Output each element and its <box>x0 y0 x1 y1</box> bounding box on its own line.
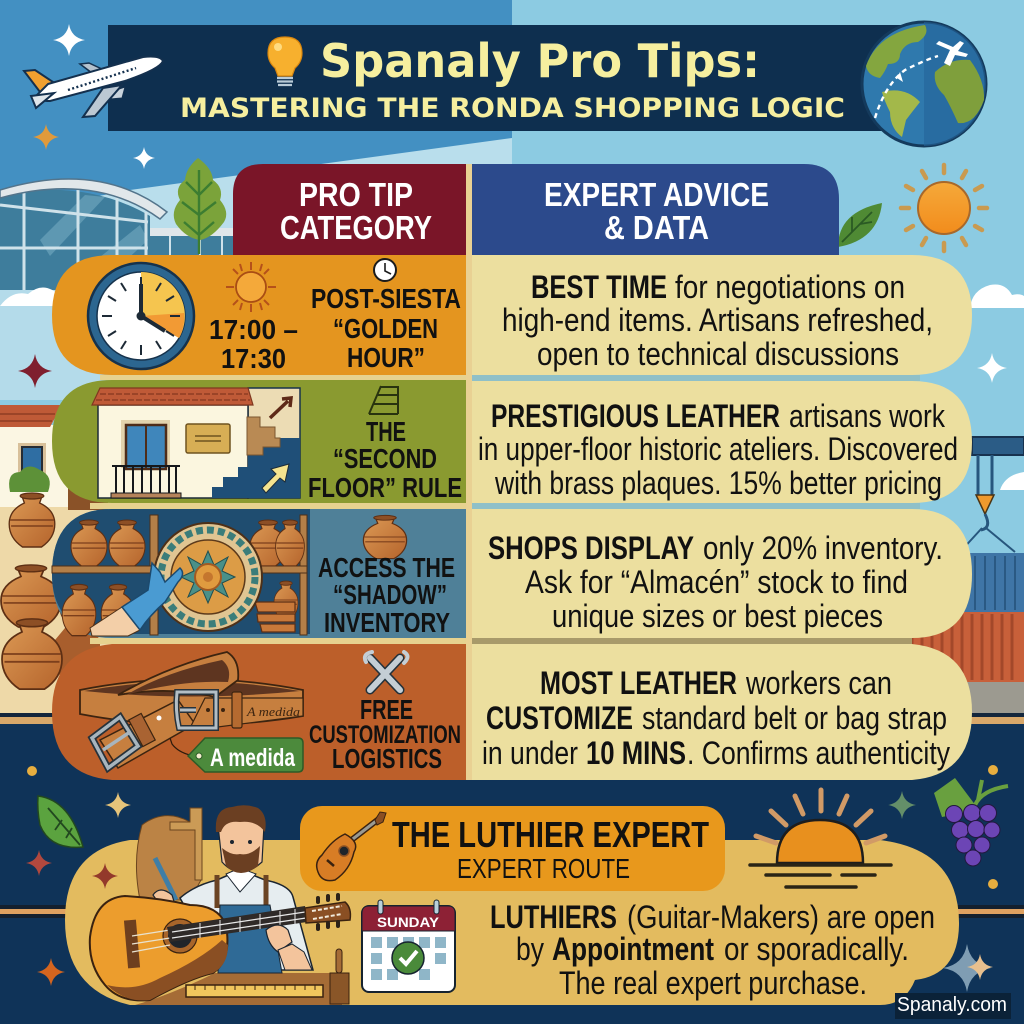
icon: star white right <box>977 353 1007 383</box>
scene: crane and containers <box>900 437 1024 682</box>
panel: header pro tip category: CATEGORY <box>280 209 432 246</box>
icon: hand with blue glove <box>90 563 183 636</box>
banner: luthier expert: THE LUTHIER EXPERT <box>392 814 709 855</box>
title text: Spanaly Pro Tips: <box>320 34 760 88</box>
icon: ladder <box>369 386 398 414</box>
icon: leaf tree <box>174 158 226 254</box>
shadow inventory label <box>318 552 455 638</box>
icon: setting sun <box>750 790 891 887</box>
luthier advice text: by <box>516 931 544 967</box>
luthier figure <box>153 805 313 973</box>
icon: globe <box>862 22 986 146</box>
second floor label: THE <box>366 416 406 447</box>
panel: row 3 advice <box>472 509 972 638</box>
icon: decorated plate <box>154 523 262 631</box>
icon: sunday calendar: SUNDAY <box>377 914 440 930</box>
icon: star white top left <box>53 24 85 56</box>
luthier advice text <box>490 899 935 1001</box>
workshop guitar mould <box>136 808 202 900</box>
time range text: 17:00 – <box>209 314 298 345</box>
panel: row 4 advice: . Confirms authenticity <box>687 735 950 771</box>
free customization label: CUSTOMIZATION <box>309 721 461 749</box>
icon: airport terminal <box>0 179 235 290</box>
table gaps <box>90 164 920 780</box>
shadow inventory label: “SHADOW” <box>333 579 447 610</box>
panel: header expert advice: EXPERT ADVICE <box>544 176 769 213</box>
icon: small clock <box>374 259 396 281</box>
panel: row 1 category <box>52 255 466 375</box>
workbench with ruler <box>135 949 349 1005</box>
icon: star white small <box>133 147 155 169</box>
panel: row 4 category <box>52 644 466 780</box>
icon: light bulb <box>268 37 302 85</box>
icon: sunday calendar <box>362 900 455 992</box>
icon: green tag <box>170 738 303 772</box>
panel: row 4 advice <box>472 644 972 780</box>
panel: row 2 advice: artisans work <box>789 398 946 434</box>
icon: sun <box>901 165 987 251</box>
panel: row 3 category <box>52 509 466 638</box>
panel: row 1 advice: open to technical discussions <box>537 336 899 372</box>
panel: row 3 advice: only 20% inventory. <box>703 530 943 566</box>
free customization label: FREE <box>360 694 413 725</box>
free customization label: LOGISTICS <box>332 743 442 774</box>
scene: potted plant <box>9 466 55 547</box>
icon: small sun <box>226 262 276 312</box>
panel: header pro tip category: PRO TIP <box>299 176 413 213</box>
post-siesta label <box>311 283 461 373</box>
shadow inventory label: ACCESS THE <box>318 552 455 583</box>
panel: header expert advice: & DATA <box>604 209 709 246</box>
panel: row 4 advice: workers can <box>745 665 892 701</box>
post-siesta label: “GOLDEN <box>333 313 438 344</box>
icon: star maroon <box>18 354 52 388</box>
panel: row 4 advice: 10 MINS <box>586 735 686 771</box>
panel: row 4 advice: in under <box>482 735 578 771</box>
icon: grapes <box>934 778 1008 866</box>
luthier advice text: or sporadically. <box>724 931 909 967</box>
post-siesta label: POST-SIESTA <box>311 283 461 314</box>
luthier advice text: LUTHIERS <box>490 899 617 935</box>
icon: leather belt <box>80 652 303 768</box>
panel: row 4 advice: standard belt or bag strap <box>642 700 947 736</box>
panel: row 2 advice <box>472 381 972 503</box>
shadow inventory label: INVENTORY <box>324 607 450 638</box>
panel: row 3 advice: Ask for “Almacén” stock to find <box>525 564 908 600</box>
scene: Spanish house left <box>0 405 108 510</box>
title text: MASTERING THE RONDA SHOPPING LOGIC <box>180 93 845 124</box>
second floor label <box>308 416 462 503</box>
icon: jar <box>363 515 407 559</box>
panel: row 3 advice: SHOPS DISPLAY <box>488 530 694 566</box>
time range text: 17:30 <box>221 343 286 374</box>
panel: row 2 advice: PRESTIGIOUS LEATHER <box>491 398 780 434</box>
second floor label: FLOOR” RULE <box>308 472 462 503</box>
panel: row 3 advice: unique sizes or best pieces <box>552 598 883 634</box>
icon: clouds <box>0 284 1024 490</box>
brand watermark: Spanaly.com <box>897 994 1007 1016</box>
decorative icons: stars, leaf and dots on navy <box>26 765 998 986</box>
panel: row 1 advice: BEST TIME <box>531 269 667 305</box>
shelf with pots <box>52 509 310 636</box>
icon: house with stairs <box>92 388 300 498</box>
icon: leaf right of header <box>838 203 882 247</box>
panel: row 1 advice <box>472 255 972 375</box>
panel: header expert advice <box>472 164 839 255</box>
illustration: luthier with guitar <box>90 805 350 1005</box>
icon: star orange <box>33 124 59 150</box>
panel: row 4 advice: MOST LEATHER <box>540 665 737 701</box>
icon: small guitar <box>317 812 386 881</box>
panel: header pro tip category <box>233 164 466 255</box>
second floor label: “SECOND <box>333 443 437 474</box>
icon: sparkle bottom right <box>943 944 993 992</box>
icon: star maroon in panel <box>92 863 118 889</box>
banner: luthier expert <box>300 806 725 891</box>
classical guitar <box>90 895 350 1000</box>
panel: row 2 advice: with brass plaques. 15% better pricing <box>494 465 942 501</box>
scene: big clay pots <box>1 565 100 689</box>
icon: wall clock <box>88 263 194 369</box>
luthier advice text: The real expert purchase. <box>559 965 867 1001</box>
free customization label <box>309 694 461 774</box>
icon: crossed wrenches <box>365 652 408 690</box>
icon: leather belt: A medida <box>246 704 301 719</box>
title text <box>180 34 845 124</box>
title band <box>108 25 918 131</box>
panel: row 1 advice: for negotiations on <box>675 269 905 305</box>
panel: row 2 category <box>52 380 466 503</box>
panel: row 4 advice: CUSTOMIZE <box>486 700 633 736</box>
luthier advice text: (Guitar-Makers) are open <box>627 899 935 935</box>
post-siesta label: HOUR” <box>347 342 425 373</box>
icon: green tag: A medida <box>210 744 296 772</box>
panel: luthier expert body <box>65 840 959 1005</box>
time range text <box>209 314 298 374</box>
icon: airplane <box>24 56 163 117</box>
banner: luthier expert: EXPERT ROUTE <box>457 853 630 884</box>
luthier advice text: Appointment <box>552 931 714 967</box>
panel: row 1 advice: high-end items. Artisans refreshed, <box>502 302 933 338</box>
